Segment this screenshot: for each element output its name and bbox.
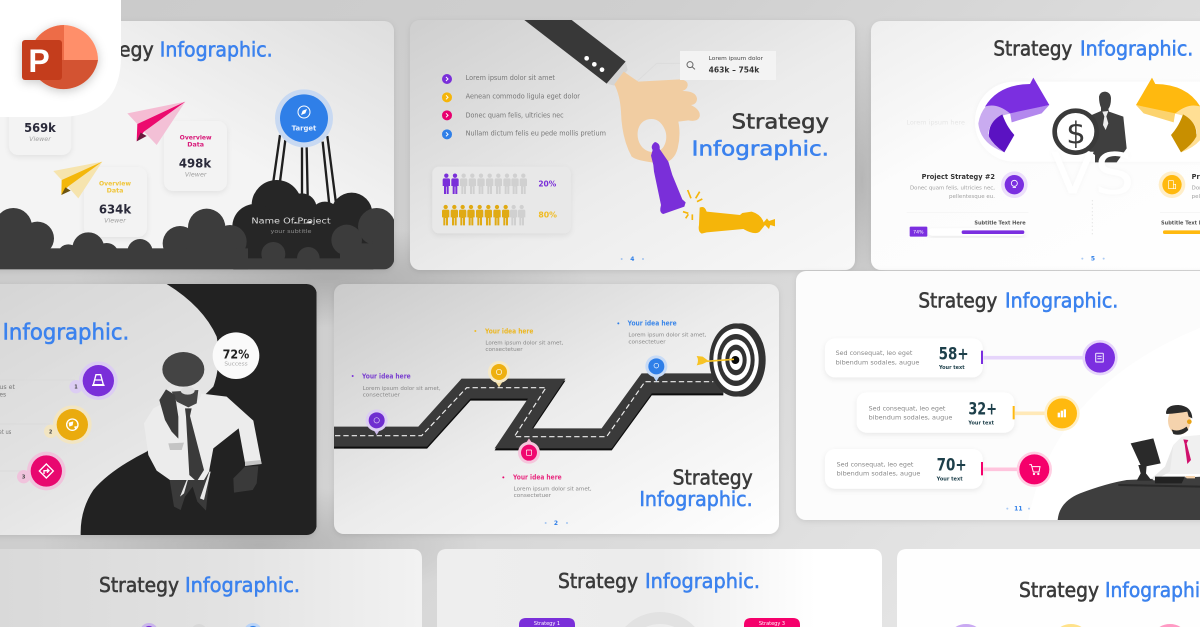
callout: range: 463k – 754k: [709, 65, 760, 74]
page number: 2: [554, 520, 558, 527]
panel: bottom right slide: [897, 549, 1200, 627]
milestone 1: consectetuer: [363, 393, 401, 399]
milestone 4: Your idea here: [627, 320, 677, 328]
card: 569k viewer: [9, 100, 71, 155]
tie: [185, 408, 204, 482]
arrow: purple: [978, 78, 1049, 152]
card: 634k viewer: [84, 167, 147, 237]
project strategy 1: [1159, 171, 1200, 200]
icon: dollar coin: $: [1066, 116, 1086, 151]
bullet 1: Lorem ipsum dolor sit amet: [466, 74, 555, 82]
icon: PowerPoint logo: P: [28, 43, 50, 79]
water tower legs: [273, 135, 336, 205]
milestone 3: [502, 438, 592, 499]
icon: yellow paper plane: [53, 162, 102, 198]
title: Strategy: [99, 573, 179, 597]
panel: target slide: [0, 21, 405, 272]
figure: man at desk: [1058, 405, 1200, 523]
stat 58+: Sed consequat, leo eget: [836, 350, 913, 357]
stat 32+: 32+: [968, 399, 997, 418]
success badge: Success: [224, 362, 248, 368]
icon: traffic cone: [92, 375, 105, 385]
impact sparks: [683, 190, 702, 220]
stat 32+: bibendum sodales, augue: [869, 415, 952, 422]
icon: magnifier: [687, 62, 695, 69]
dotted divider: [1091, 200, 1094, 237]
shirt: [1166, 435, 1200, 474]
stat 70+: Sed consequat, leo eget: [837, 461, 914, 468]
project strategy 2: Donec quam felis, ultricies nec,: [910, 186, 995, 192]
bullet 4: [442, 129, 606, 139]
bullet 2: Aenean commodo ligula eget dolor: [466, 93, 580, 101]
stat 58+: [825, 338, 1118, 377]
PowerPoint logo tile: [0, 0, 121, 117]
milestone 3: Your idea here: [512, 473, 562, 481]
title: Strategy Infographic.: [73, 38, 273, 62]
faded label: Lorem ipsum here: [906, 119, 965, 126]
milestone 4: [617, 320, 707, 382]
dart: [697, 356, 734, 365]
title: Infographic.: [185, 573, 300, 597]
project strategy 2: pellentesque eu.: [949, 194, 995, 200]
milestone 1: Your idea here: [361, 372, 411, 380]
bullet 2: [442, 92, 580, 102]
card: 498k viewer: Viewer: [185, 172, 207, 179]
stat 70+: 70+: [937, 456, 967, 475]
panel: chess strategy slide: [410, 20, 855, 270]
panel: strategy versus slide: [871, 21, 1200, 270]
icon: businessman silhouette: [1088, 92, 1127, 162]
card: 634k viewer: Data: [107, 187, 123, 194]
hand: [614, 72, 700, 163]
stat 58+: Your text: [938, 365, 965, 371]
item 3: [17, 452, 66, 490]
icon circles: [956, 624, 1180, 627]
bullet 4: Nullam dictum felis eu pede mollis pretium: [466, 130, 606, 138]
milestone 1: [352, 372, 441, 435]
project strategy 2: [910, 171, 1028, 200]
callout connector: [632, 63, 680, 86]
badge: strategy 3: [744, 618, 800, 627]
head: [167, 381, 201, 405]
title: Strategy: [732, 110, 829, 134]
stat 32+: Sed consequat, leo eget: [869, 405, 946, 412]
stat 70+: [825, 449, 1052, 489]
card: 569k viewer: Viewer: [29, 136, 51, 143]
title: Strategy: [993, 37, 1072, 61]
progress bar 74%: 74%: [913, 229, 924, 235]
icon: building: [1159, 171, 1185, 198]
road: [330, 382, 723, 440]
title: [993, 37, 1193, 61]
card: 498k viewer: Overview: [180, 135, 212, 142]
item 2: [0, 405, 92, 444]
item 1: [0, 361, 118, 400]
icon: road sign: [39, 464, 53, 478]
white curved background: [1028, 313, 1200, 520]
title: Infographic.: [1080, 37, 1193, 61]
pictogram row 80%: 80%: [538, 211, 557, 220]
title: Infographic.: [692, 137, 829, 161]
milestone 2: [474, 327, 564, 387]
page number: 11: [1014, 506, 1022, 513]
card: 569k viewer: 569k: [24, 121, 57, 135]
page number: 5: [1091, 256, 1095, 263]
badge: strategy 1: [519, 618, 575, 627]
panel: success businessman slide: [0, 284, 317, 535]
icon: bulb: [1001, 171, 1028, 198]
trousers: [168, 470, 210, 511]
callout: range: Lorem ipsum dolor: [709, 56, 764, 62]
title: Infographic.: [639, 487, 753, 511]
page number: [620, 256, 644, 261]
milestone 2: consectetuer: [485, 347, 523, 353]
icon: document: [1096, 353, 1103, 362]
title: [99, 573, 300, 597]
title: [639, 465, 753, 511]
icon: globe: [67, 419, 78, 430]
badge: strategy 1: Strategy 1: [534, 621, 560, 627]
bullet 1: [442, 74, 555, 84]
progress bar 74%: Subtitle Text Here: [974, 221, 1026, 227]
panel: bottom left slide: [0, 549, 422, 627]
bullet list: [442, 74, 606, 139]
stat 70+: bibendum sodales, augue: [837, 471, 920, 478]
progress bar right: [1160, 212, 1200, 234]
hand with watch: [233, 466, 258, 493]
card: 634k viewer: Viewer: [104, 218, 126, 225]
foreground clouds: [0, 208, 405, 272]
icon: pink paper plane: [127, 102, 185, 145]
card: 634k viewer: Overview: [99, 180, 131, 187]
panel: road roadmap slide: [330, 284, 779, 534]
milestone 3: consectetuer: [514, 493, 552, 499]
icon circles: [142, 623, 260, 627]
milestone 4: Lorem ipsum dolor sit amet,: [628, 333, 707, 339]
title: Strategy: [918, 288, 997, 312]
bullet 3: Donec quam felis, ultricies nec: [466, 111, 564, 119]
VS lettering: VS: [1051, 141, 1134, 207]
title: Infographic.: [1005, 288, 1118, 312]
dark cloud with project name: Name Of Project: [251, 216, 332, 226]
card: 498k viewer: [164, 121, 227, 191]
monitor: [1131, 438, 1161, 481]
dark cloud with project name: [232, 180, 373, 269]
tie: [1183, 439, 1191, 464]
white pill behind arrows: [975, 82, 1200, 162]
milestone 3: Lorem ipsum dolor sit amet,: [514, 486, 592, 492]
pictogram row 20%: 20%: [538, 180, 556, 189]
stat 32+: [857, 392, 1080, 433]
target board: [697, 323, 766, 397]
badge: strategy 3: Strategy 3: [759, 621, 785, 627]
milestone 1: Lorem ipsum dolor sit amet,: [363, 386, 441, 392]
panel: statistics slide: [796, 271, 1200, 523]
card: 634k viewer: 634k: [99, 202, 132, 216]
pictogram card: [432, 167, 571, 233]
item 3: 3: [22, 475, 26, 481]
card: 498k viewer: 498k: [179, 156, 212, 170]
callout: range: [680, 51, 776, 80]
title: Strategy: [1019, 578, 1099, 602]
milestone 2: Lorem ipsum dolor sit amet,: [485, 340, 564, 346]
progress bar 74%: [907, 212, 1028, 237]
stat 70+: Your text: [936, 476, 963, 482]
arm with phone: [159, 389, 178, 439]
item 1: 1: [74, 385, 78, 391]
success badge: [213, 332, 259, 379]
center ring: [625, 612, 695, 627]
stat 58+: bibendum sodales, augue: [836, 359, 919, 366]
page number: [545, 520, 568, 527]
keyboard: [1155, 477, 1185, 483]
milestone 2: Your idea here: [484, 327, 534, 335]
stat 58+: 58+: [939, 344, 969, 363]
title: Strategy: [558, 569, 638, 593]
figure: man on phone: [144, 352, 262, 511]
title: [918, 288, 1118, 312]
milestone 4: consectetuer: [628, 339, 666, 345]
page number: 4: [630, 256, 634, 263]
project strategy 2: Project Strategy #2: [922, 173, 995, 181]
desk mound: [1058, 477, 1200, 523]
page number: [1006, 506, 1030, 513]
dark curved shape: [81, 284, 317, 535]
title: Infographic.: [3, 320, 129, 345]
icon: shopping cart: [1029, 465, 1040, 475]
panel: bottom middle slide: [437, 549, 882, 627]
page number: [1081, 256, 1105, 263]
title: [1019, 578, 1200, 602]
title: Strategy: [673, 465, 753, 489]
bullet 3: [442, 110, 564, 120]
card: 498k viewer: Data: [187, 142, 204, 149]
shirt: [144, 393, 262, 480]
icon: chart: [1058, 409, 1066, 417]
success badge: 72%: [223, 346, 250, 361]
sleeve: [524, 20, 628, 86]
title: Infographic.: [645, 569, 760, 593]
arrow: yellow: [1136, 78, 1200, 152]
icon: compass: [298, 106, 310, 118]
target circle: [275, 89, 333, 147]
item 2: 2: [49, 429, 53, 435]
title: [558, 569, 760, 593]
head: [1168, 407, 1191, 435]
target circle: Target: [292, 124, 317, 132]
chess piece: fallen yellow king: [699, 207, 775, 234]
title: [692, 110, 829, 161]
icon: dollar coin: [1055, 111, 1097, 153]
dark cloud with project name: your subtitle: [270, 229, 312, 235]
chess piece: purple pawn: [651, 142, 686, 214]
stat 32+: Your text: [967, 420, 995, 426]
